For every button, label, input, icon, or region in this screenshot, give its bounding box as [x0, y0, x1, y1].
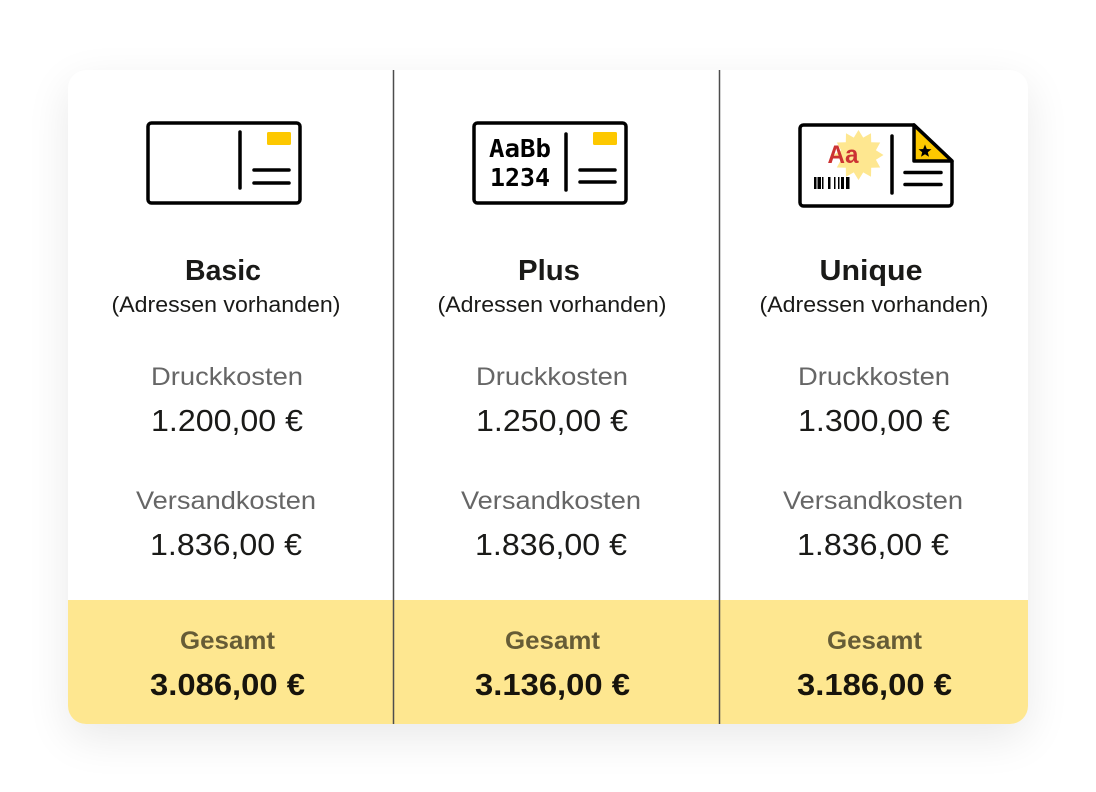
- shipping cost value: 1.836,00 €: [150, 527, 302, 562]
- print cost value: 1.300,00 €: [798, 403, 950, 438]
- shipping cost label: Versandkosten: [136, 487, 316, 515]
- shipping cost value: 1.836,00 €: [797, 527, 949, 562]
- total label: Gesamt: [180, 627, 276, 655]
- shipping cost value: 1.836,00 €: [475, 527, 627, 562]
- card background: [68, 70, 1028, 724]
- print cost label: Druckkosten: [476, 363, 628, 391]
- total label: Gesamt: [505, 627, 601, 655]
- print cost label: Druckkosten: [151, 363, 303, 391]
- icon: unique mailer with folded corner: Aa: [828, 141, 860, 169]
- print cost label: Druckkosten: [798, 363, 950, 391]
- total value: 3.186,00 €: [797, 667, 952, 702]
- total label: Gesamt: [827, 627, 923, 655]
- icon: plus postcard: 1234: [490, 163, 550, 192]
- subheading: (Adressen vorhanden): [760, 292, 988, 317]
- subheading: (Adressen vorhanden): [438, 292, 666, 317]
- print cost value: 1.250,00 €: [476, 403, 628, 438]
- shipping cost label: Versandkosten: [461, 487, 641, 515]
- icon: unique mailer with folded corner: [800, 125, 952, 206]
- panel: Plus: [438, 123, 666, 702]
- heading: Basic: Basic: [185, 255, 261, 287]
- icon: plus postcard: [474, 123, 626, 203]
- icon: basic postcard: [148, 123, 300, 203]
- total band: [68, 600, 1028, 724]
- heading: Unique: Unique: [820, 255, 922, 287]
- total value: 3.086,00 €: [150, 667, 305, 702]
- heading: Plus: Plus: [518, 255, 580, 287]
- total value: 3.136,00 €: [475, 667, 630, 702]
- print cost value: 1.200,00 €: [151, 403, 303, 438]
- icon: plus postcard: AaBb: [489, 134, 551, 163]
- panel: Unique: [760, 125, 988, 702]
- subheading: (Adressen vorhanden): [112, 292, 340, 317]
- column dividers: [394, 70, 720, 724]
- shipping cost label: Versandkosten: [783, 487, 963, 515]
- panel: Basic: [112, 123, 340, 702]
